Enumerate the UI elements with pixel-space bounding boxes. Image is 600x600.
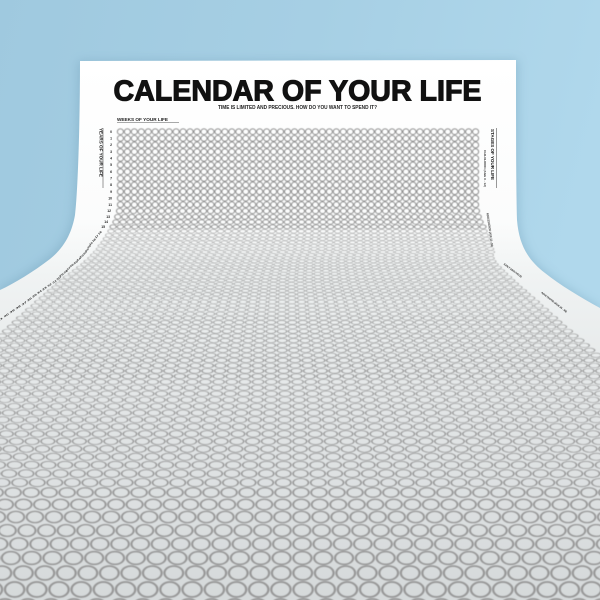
- year numbers along left edge: 15: [101, 225, 105, 229]
- stage label: adolescence: ADOLESCENCE (AGE 13 - 19): [486, 213, 494, 247]
- stage label: adulthood: ADULTHOOD (AGE 35 - 65): [540, 291, 568, 313]
- year numbers along left edge: 20: [86, 244, 92, 249]
- stage label: early adulthood: EARLY ADULTHOOD: [503, 262, 523, 278]
- title: CALENDAR OF YOUR LIFE: [114, 76, 482, 108]
- year numbers along left edge: 2: [110, 143, 112, 147]
- year numbers along left edge: 38: [15, 304, 22, 310]
- year numbers along left edge: 33: [42, 286, 47, 291]
- year numbers along left edge: 3: [110, 150, 112, 154]
- year numbers along left edge: 19: [88, 241, 94, 246]
- years axis label: YEARS OF YOUR LIFE: [98, 128, 104, 177]
- year numbers along left edge: 28: [63, 269, 69, 274]
- year numbers along left edge: 32: [47, 283, 52, 288]
- chart: weeks-of-life circle grid: [0, 129, 600, 600]
- year numbers along left edge: 21: [84, 247, 90, 253]
- subtitle: TIME IS LIMITED AND PRECIOUS. HOW DO YOU WANT TO SPEND IT?: [218, 105, 377, 111]
- year numbers along left edge: [0, 130, 112, 322]
- year numbers along left edge: 6: [110, 170, 112, 174]
- year numbers along left edge: 40: [3, 312, 10, 318]
- year numbers along left edge: 34: [37, 289, 43, 295]
- year numbers along left edge: 7: [110, 177, 112, 181]
- year numbers along left edge: 4: [110, 157, 112, 161]
- year numbers along left edge: 14: [104, 220, 108, 224]
- stages axis label: [490, 128, 496, 188]
- year numbers along left edge: 35: [32, 293, 37, 298]
- year numbers along left edge: 36: [27, 297, 32, 302]
- year numbers along left edge: 5: [110, 163, 112, 167]
- weeks axis label: WEEKS OF YOUR LIFE: [117, 117, 168, 122]
- year numbers along left edge: 1: [110, 137, 112, 141]
- year numbers along left edge: 8: [110, 183, 112, 187]
- year numbers along left edge: 17: [94, 234, 100, 239]
- year numbers along left edge: 13: [106, 215, 110, 219]
- year numbers along left edge: 0: [110, 130, 112, 134]
- year numbers along left edge: 9: [110, 190, 112, 194]
- year numbers along left edge: 31: [52, 279, 57, 284]
- year numbers along left edge: 16: [97, 230, 103, 236]
- year numbers along left edge: 11: [108, 203, 112, 207]
- year numbers along left edge: 37: [21, 300, 28, 306]
- year numbers along left edge: 10: [108, 196, 112, 200]
- stage label: childhood: CHILDHOOD (AGE 0 - 12): [483, 150, 487, 187]
- year numbers along left edge: 39: [9, 308, 16, 314]
- year numbers along left edge: 23: [79, 254, 85, 259]
- year numbers along left edge: 24: [76, 257, 82, 262]
- year numbers along left edge: 25: [73, 260, 79, 265]
- year numbers along left edge: 12: [107, 209, 111, 213]
- year numbers along left edge: 26: [69, 263, 75, 268]
- stages axis label: STAGES OF YOUR LIFE: [490, 129, 495, 180]
- year numbers along left edge: 27: [66, 266, 72, 271]
- year numbers along left edge: 30: [56, 276, 61, 281]
- year numbers along left edge: 22: [82, 250, 88, 256]
- year numbers along left edge: 18: [91, 238, 97, 243]
- year numbers along left edge: 29: [59, 273, 64, 278]
